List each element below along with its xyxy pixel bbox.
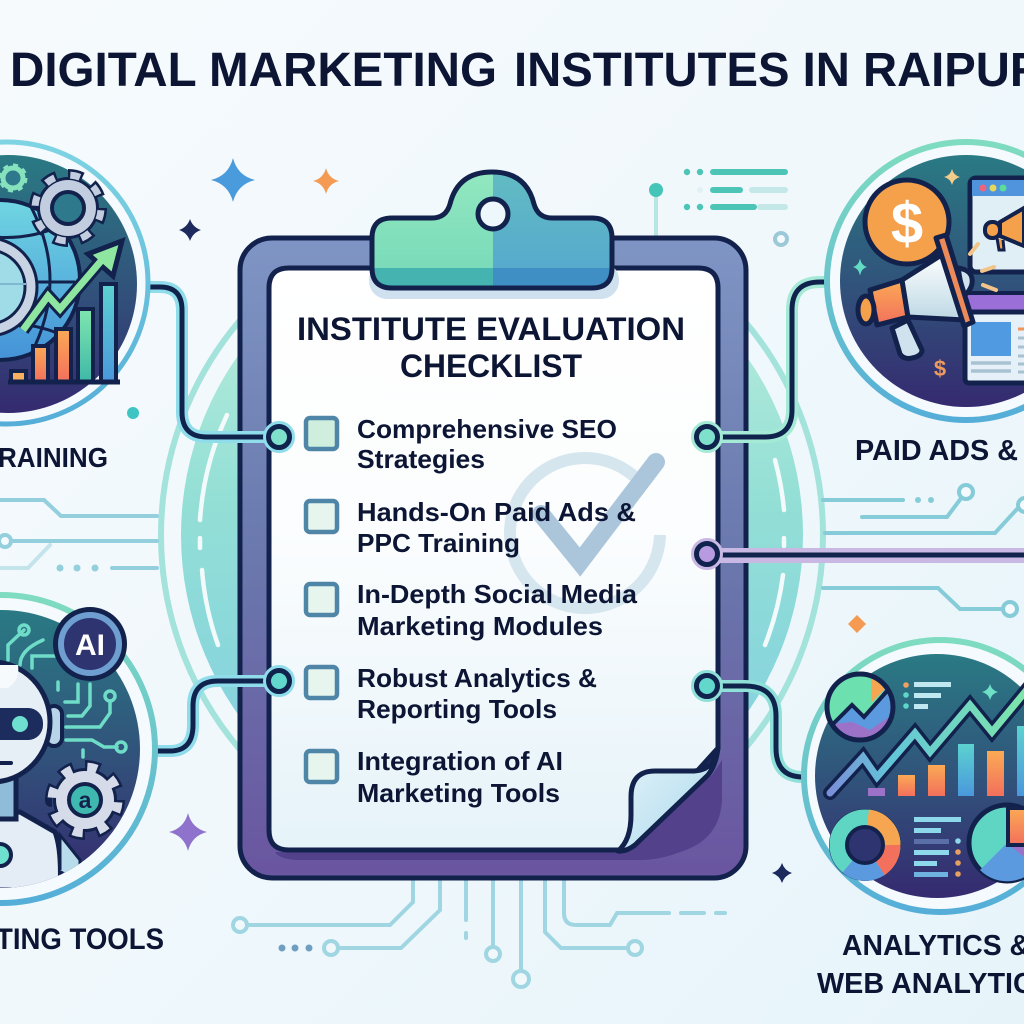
clipboard paper: [269, 268, 718, 850]
circuit traces: right: [823, 485, 1024, 616]
sparkle: purple: [169, 813, 207, 851]
title: DIGITAL MARKETING: [10, 44, 497, 97]
circuit traces inside AI panel: [8, 625, 126, 757]
checklist heading: CHECKLIST: [400, 348, 582, 384]
label: training: RAINING: [0, 442, 108, 473]
connector: AI tools circle to checklist: [155, 681, 278, 751]
page fold: [618, 748, 718, 851]
watermark checkmark: [510, 458, 660, 608]
status bars and node decoration, top right: [649, 169, 788, 245]
sound rays: [970, 244, 996, 290]
panel: SEO training: [0, 142, 148, 424]
checklist heading: [297, 311, 685, 384]
clipboard: [240, 170, 746, 878]
pie chart top: [827, 674, 893, 740]
circuit traces: left: [0, 500, 157, 572]
connector: SEO circle to checklist: [150, 287, 278, 437]
dollar mark: $: [934, 356, 946, 381]
checklist item 1: [306, 414, 617, 474]
sparkle: navy left: [179, 219, 201, 241]
checklist item 1: Comprehensive SEO: [357, 414, 617, 444]
gray gear: [35, 175, 101, 241]
checklist item 3: In-Depth Social Media: [357, 579, 638, 609]
checklist item 5: Marketing Tools: [357, 778, 560, 808]
megaphone: [858, 235, 973, 358]
clipboard shadow: [275, 760, 722, 860]
dollar coin: [865, 180, 949, 264]
checklist item 4: Robust Analytics &: [357, 663, 597, 693]
small green gear: [2, 167, 24, 189]
title: [10, 44, 1024, 97]
diamond: orange: [848, 615, 866, 633]
AI badge: AI: [75, 629, 105, 662]
connector nodes on clipboard: [265, 423, 721, 700]
sparkle: teal: [853, 259, 867, 275]
pie chart bottom: [969, 805, 1024, 881]
clip shadow: [369, 262, 619, 299]
gear with letter a: a: [79, 787, 92, 813]
checklist heading: INSTITUTE EVALUATION: [297, 311, 685, 347]
list rows: [914, 817, 961, 877]
checklist item 2: [306, 497, 636, 558]
bar chart: [8, 284, 120, 382]
icon: SEO globe, magnifier and growth chart: [0, 167, 80, 360]
connector: analytics circle to checklist: [707, 686, 803, 777]
sparkle: gold: [944, 169, 960, 185]
checklist item 4: Reporting Tools: [357, 694, 557, 724]
sparkle: blue: [211, 158, 255, 202]
label: marketing tools: TING TOOLS: [0, 923, 164, 956]
central glow rings: [158, 318, 826, 752]
checklist item 5: Integration of AI: [357, 746, 563, 776]
dollar coin: $: [891, 191, 923, 256]
checklist item 2: PPC Training: [357, 528, 520, 558]
dot: teal: [127, 407, 139, 419]
checklist item 5: [306, 746, 563, 808]
magnifier: [0, 244, 31, 330]
sparkle: orange: [313, 168, 339, 194]
bar chart: [868, 726, 1024, 796]
browser window: [965, 178, 1024, 383]
AI badge: [53, 607, 127, 681]
checklist item 3: [306, 579, 638, 641]
top legend: [903, 682, 951, 709]
sparkle: teal: [982, 684, 998, 700]
ad page: [965, 293, 1024, 312]
sparkle: navy right: [772, 863, 792, 883]
connector: paid ads circle to checklist: [707, 282, 828, 437]
checklist item 2: Hands-On Paid Ads &: [357, 497, 636, 527]
gear with letter a: [52, 767, 118, 833]
checklist item 4: [306, 663, 597, 724]
circuit traces: bottom: [233, 880, 725, 987]
robot: [0, 662, 80, 890]
metal clip: [372, 170, 614, 290]
panel: AI marketing tools: [0, 595, 155, 903]
trend line: [830, 686, 1024, 793]
growth arrow: [23, 241, 122, 330]
panel: paid ads and PPC: [827, 142, 1024, 420]
checklist item 3: Marketing Modules: [357, 611, 603, 641]
checklist item 1: Strategies: [357, 444, 485, 474]
donut chart: [829, 809, 901, 881]
label: paid ads: PAID ADS &: [855, 435, 1018, 467]
connector: purple line to right edge: [693, 540, 1024, 568]
clipboard board: [240, 238, 746, 878]
label: analytics: [817, 930, 1024, 1000]
panel: analytics: [804, 640, 1024, 912]
